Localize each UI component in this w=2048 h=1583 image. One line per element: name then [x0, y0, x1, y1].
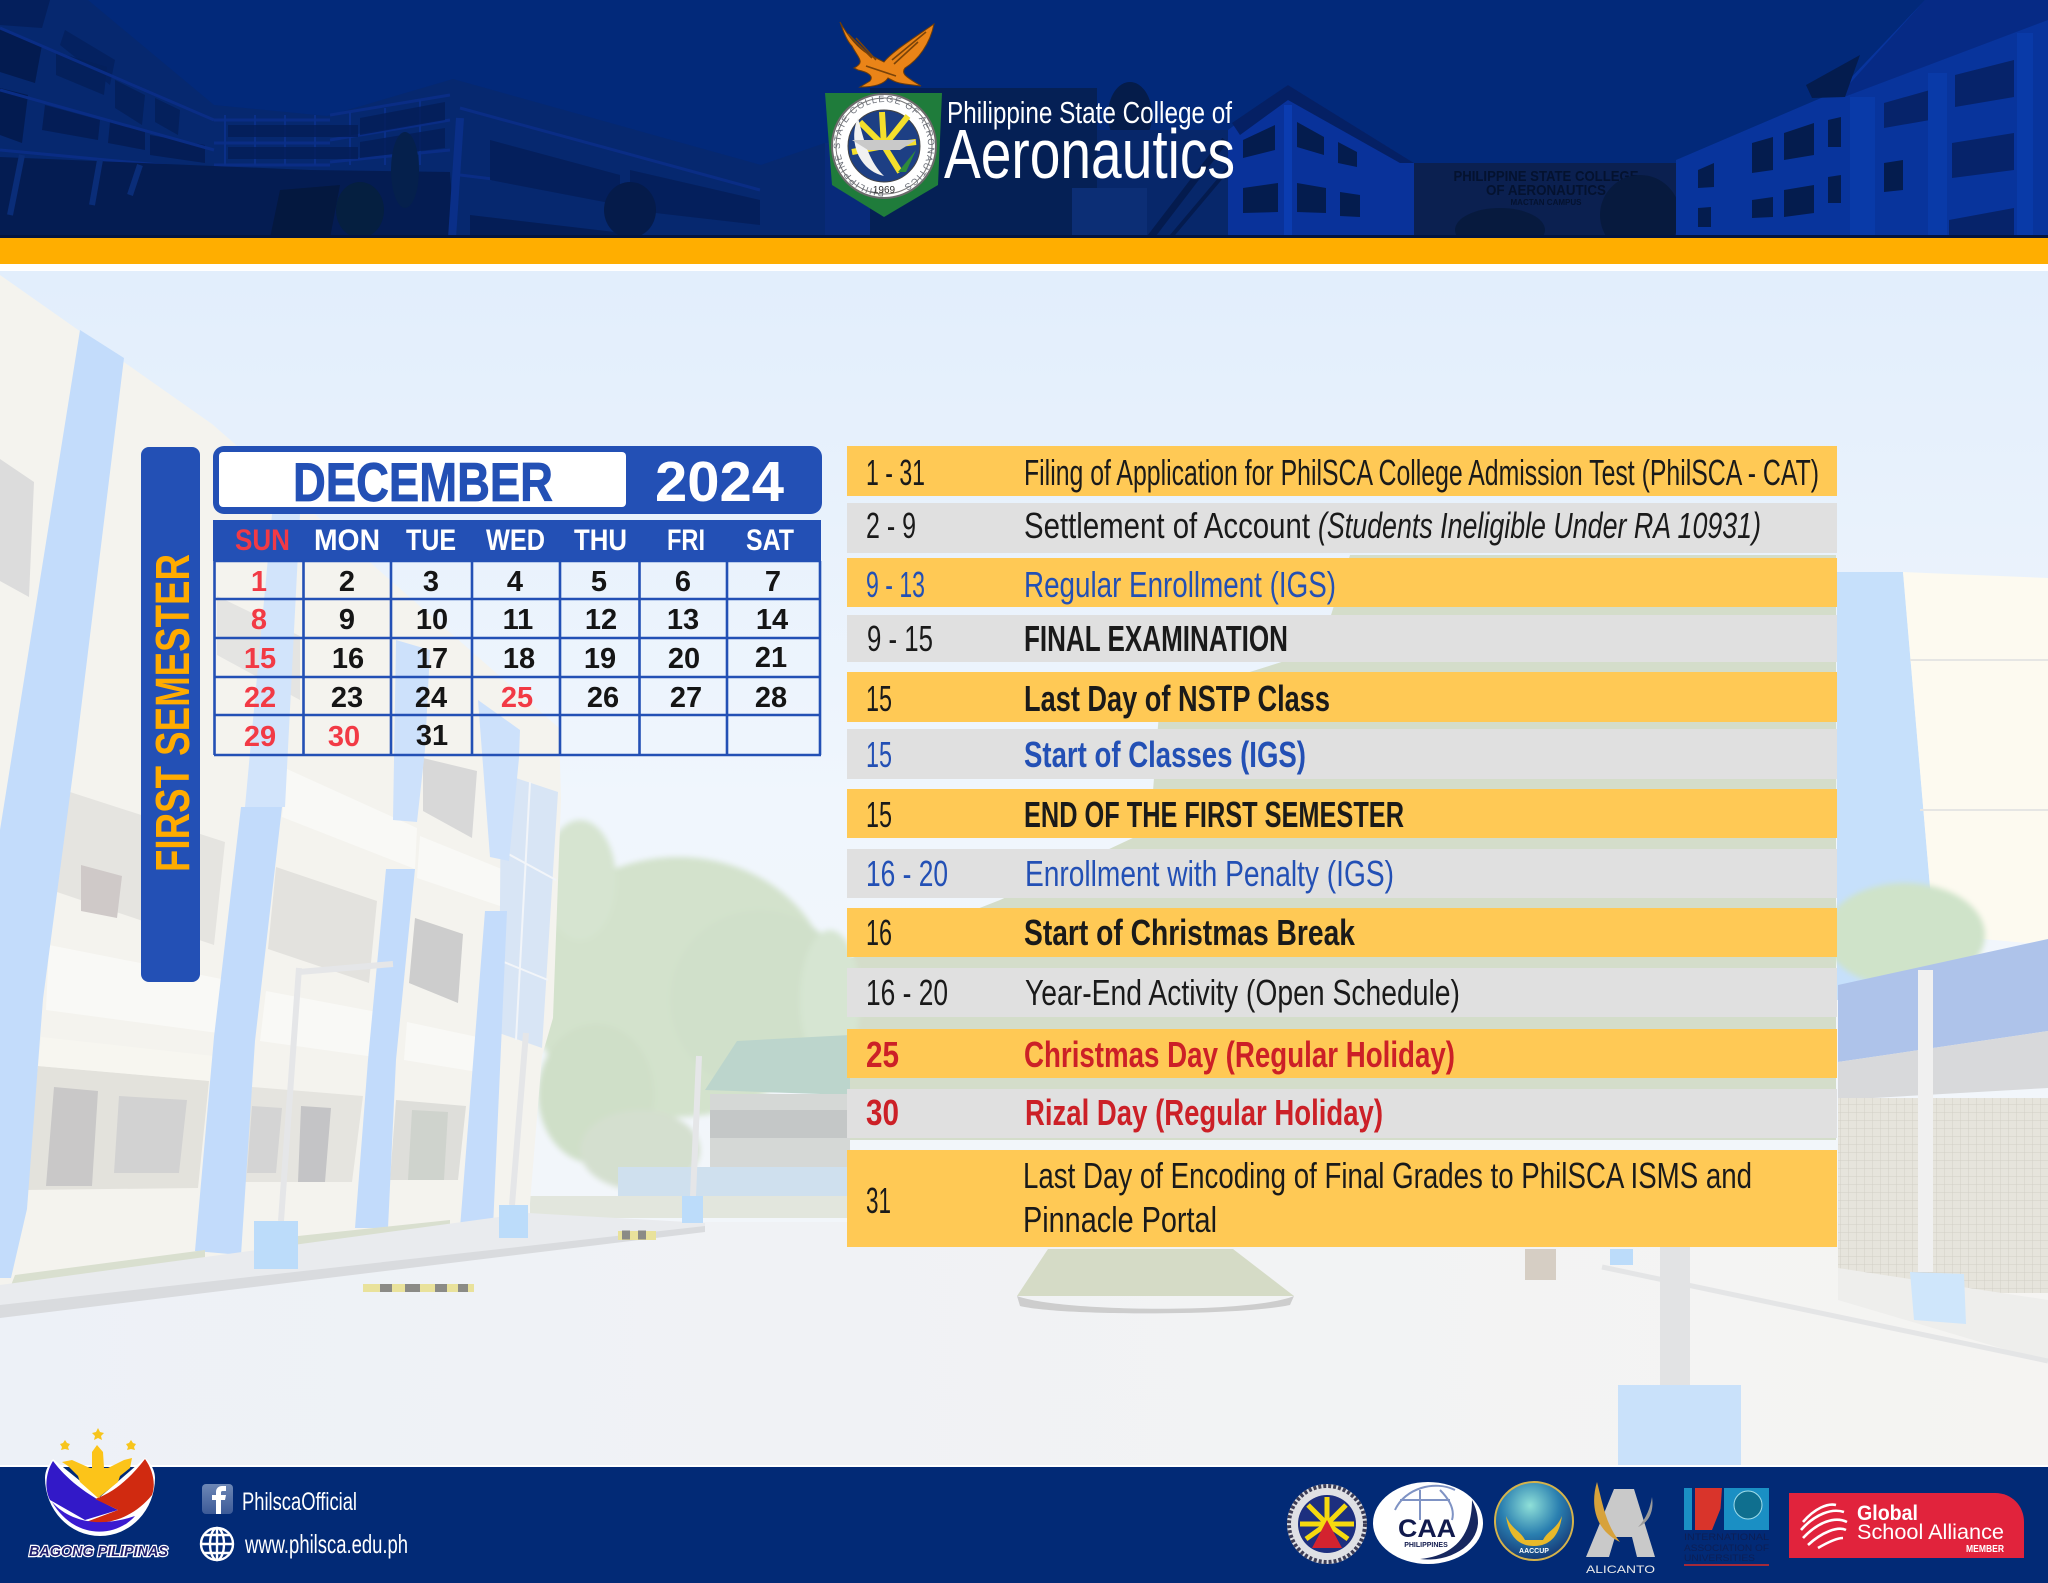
calendar title bar: DECEMBER — [293, 451, 553, 513]
row: 2-9 settlement: 2 - 9 — [866, 505, 916, 546]
calendar dates: 15 — [244, 643, 276, 675]
white strip under band — [0, 264, 2048, 271]
orange header band — [0, 238, 2048, 264]
row: 15 NSTP — [847, 672, 1837, 722]
header banner with campus silhouette — [0, 0, 2048, 255]
row: 9-13 regular enrollment: Regular Enrollment (IGS) — [1024, 564, 1336, 605]
calendar dates: 16 — [332, 643, 364, 675]
weekday header: MON — [314, 524, 380, 557]
calendar dates: 7 — [765, 566, 781, 598]
panel: calendar — [213, 446, 822, 755]
calendar dates: 25 — [501, 682, 533, 714]
logo: CAA Philippines: PHILIPPINES — [1404, 1542, 1448, 1549]
row: 30 rizal day: 30 — [866, 1092, 899, 1133]
calendar dates: 18 — [503, 643, 535, 675]
row: 15 NSTP: Last Day of NSTP Class — [1024, 678, 1330, 719]
logo: Bagong Pilipinas — [29, 1428, 168, 1560]
row: 2-9 settlement: (Students Ineligible Under RA 10931) — [1318, 505, 1761, 546]
logo: Global School Alliance: MEMBER — [1966, 1544, 2005, 1555]
logo: Bagong Pilipinas: BAGONG PILIPINAS — [29, 1543, 168, 1560]
weekday header: WED — [486, 524, 545, 557]
calendar dates: 2 — [339, 566, 355, 598]
calendar dates: 20 — [668, 643, 700, 675]
right wing — [1837, 572, 1930, 1000]
heading: college name: Aeronautics — [944, 115, 1235, 193]
logo: PhilSCA shield seal: 1969 — [873, 185, 896, 196]
weekday header — [213, 520, 821, 561]
calendar dates: 30 — [328, 721, 360, 753]
shed behind the tree — [705, 1035, 850, 1095]
row: 9-15 final examination: FINAL EXAMINATION — [1024, 618, 1288, 659]
calendar dates: 21 — [755, 642, 787, 674]
icon: eagle emblem — [840, 22, 934, 87]
row: 30 rizal day: Rizal Day (Regular Holiday) — [1025, 1092, 1383, 1133]
row: 9-13 regular enrollment: 9 - 13 — [866, 564, 925, 605]
blue pillars — [0, 330, 124, 1278]
calendar dates: 12 — [585, 604, 617, 636]
calendar dates: 19 — [584, 643, 616, 675]
logo: CHED seal — [1287, 1484, 1367, 1564]
row: 15 end of semester: END OF THE FIRST SEMESTER — [1024, 794, 1404, 835]
calendar dates — [244, 566, 788, 753]
calendar dates: 4 — [507, 566, 523, 598]
panel: first semester side bar — [141, 447, 200, 982]
calendar dates: 13 — [667, 604, 699, 636]
row: 15 end of semester: 15 — [866, 794, 892, 835]
glass curtain wall — [499, 773, 558, 1048]
campus sign wall: OF AERONAUTICS — [1486, 182, 1606, 199]
logo: International Association of Universities: UNIVERSITIES — [1684, 1553, 1755, 1563]
weekday header: SAT — [746, 524, 794, 557]
calendar dates: 5 — [591, 566, 607, 598]
speed bumps — [363, 1284, 474, 1292]
icon: facebook — [202, 1484, 233, 1514]
row: 15 end of semester — [847, 789, 1837, 838]
calendar dates: 11 — [503, 604, 533, 636]
calendar dates: 26 — [587, 682, 619, 714]
calendar dates: 23 — [331, 682, 363, 714]
calendar dates: 29 — [244, 721, 276, 753]
row: 15 start of classes: 15 — [866, 734, 892, 775]
row: 31 encoding of grades — [847, 1150, 1837, 1247]
icon: globe — [201, 1528, 233, 1560]
calendar dates: 31 — [416, 720, 448, 752]
footer band — [0, 1465, 2048, 1583]
calendar dates: 27 — [670, 682, 702, 714]
row: 16 christmas break: 16 — [866, 912, 892, 953]
left building wall — [0, 275, 561, 1285]
row: 25 christmas day — [847, 1029, 1837, 1078]
left courtyard building — [0, 0, 868, 238]
canopy of trees behind the schedule — [847, 555, 1836, 1140]
background photo: campus building and grounds — [0, 271, 2048, 1472]
calendar title bar: 2024 — [655, 450, 784, 514]
logo: AACCUP — [1495, 1482, 1573, 1560]
logo: PhilSCA shield seal: PHILIPPINE STATE COLLEGE OF AERONAUTICS — [834, 96, 934, 196]
logo: Global School Alliance: School Alliance — [1857, 1521, 2004, 1544]
weekday header: TUE — [406, 524, 456, 557]
text: facebook handle: PhilscaOfficial — [242, 1488, 357, 1516]
row: 31 encoding of grades: Last Day of Encoding of Final Grades to PhilSCA ISMS and — [1023, 1155, 1752, 1196]
calendar dates: 8 — [251, 604, 267, 636]
calendar dates: 17 — [416, 643, 448, 675]
campus sign wall — [1414, 163, 1676, 235]
row: 31 encoding of grades: 31 — [866, 1180, 891, 1221]
logo: CAA Philippines: CAA — [1398, 1515, 1456, 1543]
row: 9-15 final examination: 9 - 15 — [867, 618, 933, 659]
row: 16-20 penalty enrollment: 16 - 20 — [866, 853, 948, 894]
calendar dates: 28 — [755, 682, 787, 714]
row: 16-20 year-end activity: Year-End Activity (Open Schedule) — [1025, 972, 1460, 1013]
row: 16-20 year-end activity — [847, 968, 1837, 1017]
row: 15 start of classes — [847, 729, 1837, 779]
calendar dates: 14 — [756, 604, 788, 636]
panel: schedule list — [847, 446, 1837, 1247]
row: 25 christmas day: Christmas Day (Regular Holiday) — [1024, 1034, 1455, 1075]
logo: International Association of Universities: ASSOCIATION OF — [1684, 1543, 1770, 1553]
calendar dates: 1 — [251, 566, 267, 598]
windows and recesses — [0, 459, 34, 597]
centre building behind logo — [825, 82, 1240, 238]
row: 2-9 settlement: Settlement of Account — [1024, 505, 1310, 546]
weekday header: SUN — [235, 524, 290, 557]
right two-storey building — [1228, 85, 1414, 238]
row: 15 start of classes: Start of Classes (IGS) — [1024, 734, 1306, 775]
text: website: www.philsca.edu.ph — [244, 1529, 408, 1559]
row: 15 NSTP: 15 — [866, 678, 892, 719]
light poles — [281, 964, 699, 1221]
calendar dates: 9 — [339, 604, 355, 636]
shrubs at wall base — [12, 1250, 205, 1284]
campus sign wall: PHILIPPINE STATE COLLEGE — [1454, 168, 1638, 185]
row: 16 christmas break — [847, 908, 1837, 957]
right main building — [1676, 0, 2048, 238]
heading: college name — [944, 95, 1235, 193]
calendar grid — [214, 561, 821, 755]
heading: college name: Philippine State College of — [947, 95, 1232, 130]
calendar dates: 22 — [244, 682, 276, 714]
row: 25 christmas day: 25 — [866, 1034, 899, 1075]
campus sign wall: MACTAN CAMPUS — [1511, 198, 1582, 207]
row: 31 encoding of grades: Pinnacle Portal — [1023, 1199, 1217, 1240]
logo: Global School Alliance — [1789, 1493, 2024, 1558]
row: 16-20 year-end activity: 16 - 20 — [866, 972, 948, 1013]
logo: Global School Alliance: Global — [1857, 1502, 1918, 1525]
calendar dates: 24 — [415, 682, 447, 714]
weekday header: THU — [574, 524, 627, 557]
calendar dates: 10 — [416, 604, 448, 636]
row: 9-13 regular enrollment — [847, 558, 1837, 607]
traffic island and flagpole — [1017, 1249, 1294, 1296]
balconies — [46, 945, 252, 1037]
row: 16-20 penalty enrollment — [847, 849, 1837, 898]
calendar title bar — [213, 446, 822, 514]
logo: International Association of Universities: INTERNATIONAL — [1684, 1532, 1769, 1542]
row: 30 rizal day — [847, 1089, 1837, 1138]
logo: International Association of Universities — [1684, 1488, 1770, 1566]
row: 16-20 penalty enrollment: Enrollment with Penalty (IGS) — [1025, 853, 1394, 894]
logo: CAA Philippines — [1373, 1482, 1483, 1564]
logo: Alicanto: ALICANTO — [1586, 1564, 1656, 1576]
row: 16 christmas break: Start of Christmas Break — [1024, 912, 1356, 953]
weekday header: FRI — [667, 524, 705, 557]
logo: AACCUP: AACCUP — [1519, 1548, 1549, 1555]
row: 2-9 settlement — [847, 503, 1837, 553]
calendar dates: 3 — [423, 566, 439, 598]
logo: Alicanto — [1586, 1482, 1656, 1576]
panel: first semester side bar: FIRST SEMESTER — [147, 554, 200, 872]
row: 1-31 filing: 1 - 31 — [866, 452, 925, 493]
row: 1-31 filing — [847, 446, 1837, 496]
sidewalk and curb — [0, 1213, 705, 1309]
calendar dates: 6 — [675, 566, 691, 598]
row: 9-15 final examination — [847, 615, 1837, 662]
